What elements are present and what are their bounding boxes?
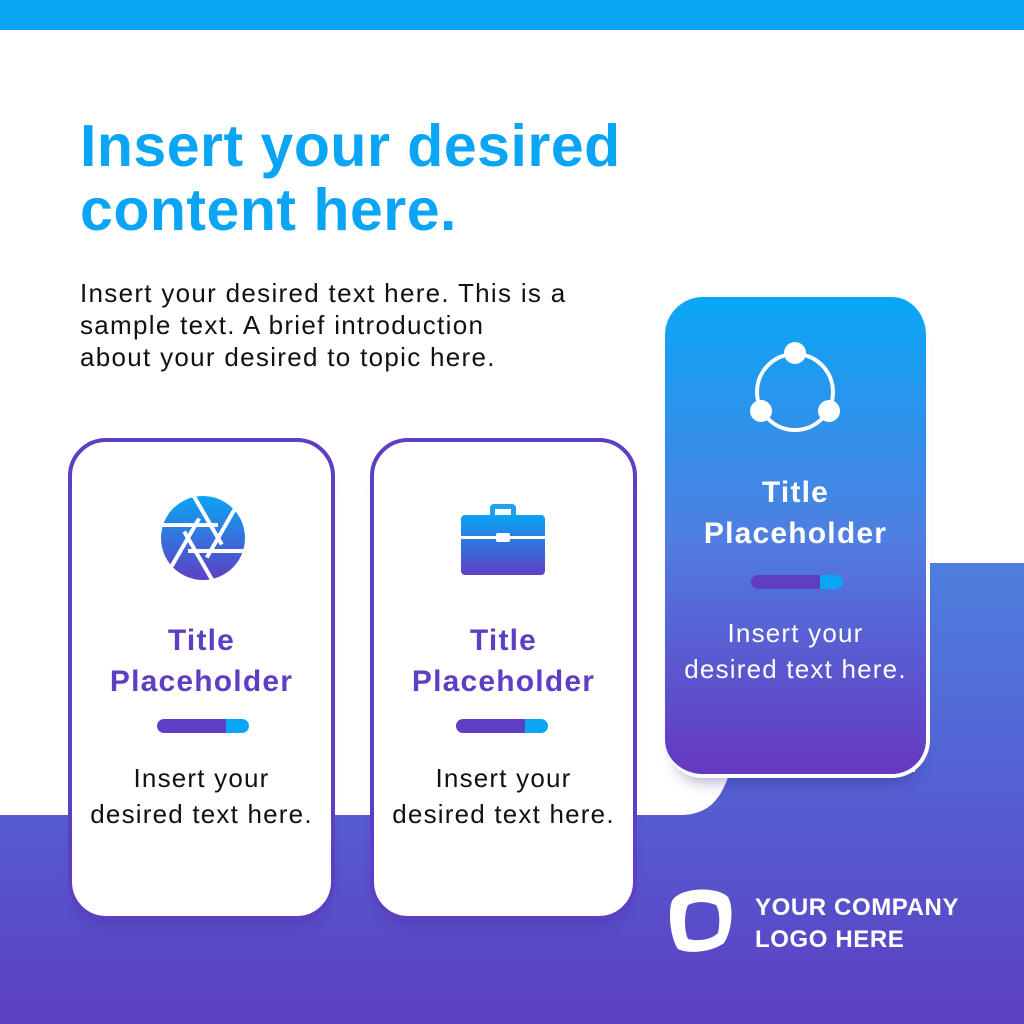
card title: Placeholder	[110, 665, 293, 698]
card text	[90, 763, 313, 829]
card title: Placeholder	[412, 665, 595, 698]
card text	[392, 763, 615, 829]
logo text: LOGO HERE	[755, 926, 904, 953]
intro text: about your desired to topic here.	[80, 342, 496, 372]
progress bar	[751, 575, 843, 589]
logo text	[755, 894, 959, 953]
card 1	[68, 438, 335, 920]
card title: Title	[762, 476, 829, 509]
card title: Placeholder	[704, 517, 887, 550]
card text: desired text here.	[684, 654, 907, 684]
icon: logo	[670, 890, 732, 952]
card text: Insert your	[435, 763, 572, 793]
title: Insert your desired	[80, 113, 621, 179]
progress bar	[456, 719, 548, 733]
card 3 highlighted	[665, 297, 930, 778]
card text: Insert your	[133, 763, 270, 793]
card 2	[370, 438, 637, 920]
icon: share cycle	[750, 342, 840, 432]
card title	[110, 624, 293, 698]
card title	[412, 624, 595, 698]
company logo	[670, 890, 959, 953]
logo text: YOUR COMPANY	[755, 894, 959, 921]
card text: Insert your	[727, 618, 864, 648]
title	[80, 113, 621, 243]
card title: Title	[470, 624, 537, 657]
card title: Title	[168, 624, 235, 657]
progress bar	[157, 719, 249, 733]
card text	[684, 618, 907, 684]
card title	[704, 476, 887, 550]
intro text: sample text. A brief introduction	[80, 310, 484, 340]
card text: desired text here.	[392, 799, 615, 829]
top bar	[0, 0, 1024, 30]
intro text	[80, 278, 566, 372]
icon: aperture	[161, 496, 245, 580]
title: content here.	[80, 177, 457, 243]
card text: desired text here.	[90, 799, 313, 829]
intro text: Insert your desired text here. This is a	[80, 278, 566, 308]
icon: briefcase	[461, 504, 545, 575]
